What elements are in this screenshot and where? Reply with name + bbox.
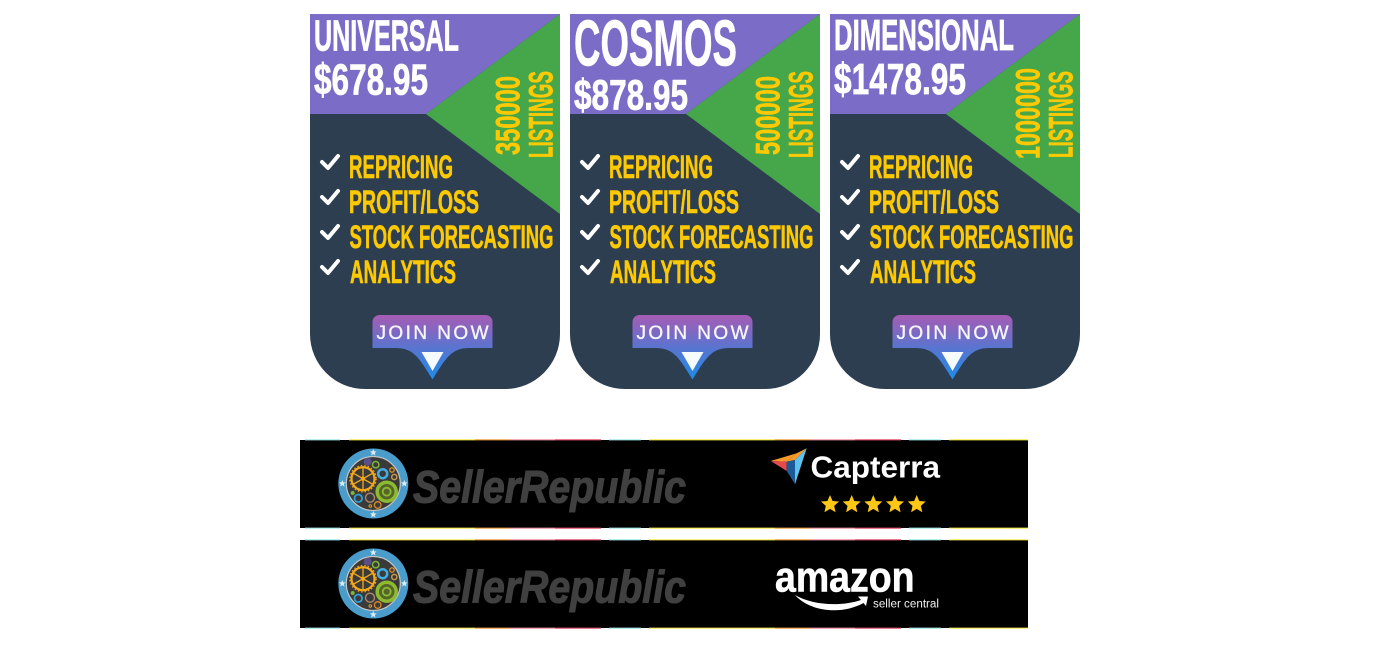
feature: analytics: ANALYTICS (870, 254, 976, 290)
feature: stock forecasting: STOCK FORECASTING (870, 219, 1074, 255)
icon: Seller Republic gear badge (338, 548, 408, 618)
top colour strip (305, 439, 1028, 440)
green listing triangle (426, 14, 560, 214)
panel: Amazon banner (300, 539, 1028, 629)
button: join now (632, 315, 752, 380)
icon: Capterra arrow (771, 448, 807, 484)
listings label: LISTINGS (1042, 71, 1080, 158)
card body (310, 14, 560, 389)
icon: check 2 (582, 191, 598, 203)
panel: Universal plan (310, 12, 560, 389)
bottom colour strip (305, 628, 1028, 629)
purple header (570, 14, 820, 114)
banner background (300, 440, 1028, 528)
button: join now: JOIN NOW (376, 323, 489, 344)
feature: stock forecasting: STOCK FORECASTING (610, 219, 814, 255)
button: join now (372, 315, 492, 380)
icon: check 1 (582, 156, 598, 168)
panel: Dimensional plan (830, 11, 1080, 389)
card body (830, 14, 1080, 389)
five star rating (821, 495, 926, 512)
feature: profit/loss: PROFIT/LOSS (869, 184, 999, 220)
feature: profit/loss: PROFIT/LOSS (609, 184, 739, 220)
icon: check 1 (322, 156, 338, 168)
purple header (830, 14, 1080, 114)
green listing triangle (946, 14, 1080, 214)
plan price: $678.95 (314, 56, 428, 104)
feature: profit/loss: PROFIT/LOSS (349, 184, 479, 220)
seller central label: seller central (873, 599, 939, 611)
button: join now: JOIN NOW (636, 323, 749, 344)
feature: analytics: ANALYTICS (610, 254, 716, 290)
feature: repricing: REPRICING (349, 149, 453, 185)
plan name: DIMENSIONAL (834, 11, 1014, 60)
green listing triangle (686, 14, 820, 214)
listings label: LISTINGS (782, 71, 820, 158)
top colour strip (305, 539, 1028, 540)
feature: repricing: REPRICING (609, 149, 713, 185)
purple header (310, 14, 560, 114)
button: join now: JOIN NOW (896, 323, 1009, 344)
feature: stock forecasting: STOCK FORECASTING (350, 219, 554, 255)
Seller Republic wordmark: SellerRepublic (413, 462, 686, 512)
panel: Cosmos plan (570, 6, 820, 389)
listings label: LISTINGS (522, 71, 560, 158)
icon: check 3 (582, 226, 598, 238)
listings count: 1000000 (1010, 68, 1048, 159)
icon: check 2 (322, 191, 338, 203)
icon: check 3 (322, 226, 338, 238)
button: join now (892, 315, 1012, 380)
listings count: 350000 (490, 76, 528, 155)
Amazon wordmark: amazon (775, 554, 914, 602)
icon: check 4 (582, 261, 598, 273)
feature: analytics: ANALYTICS (350, 254, 456, 290)
icon: Amazon smile arrow (795, 595, 868, 610)
Capterra wordmark: Capterra (810, 451, 941, 485)
plan name: UNIVERSAL (314, 12, 459, 60)
feature: repricing: REPRICING (869, 149, 973, 185)
bottom colour strip (305, 528, 1028, 529)
listings count: 500000 (750, 76, 788, 155)
icon: check 4 (322, 261, 338, 273)
icon: check 2 (842, 191, 858, 203)
icon: check 4 (842, 261, 858, 273)
Seller Republic wordmark: SellerRepublic (413, 562, 686, 612)
banner background (300, 540, 1028, 628)
icon: Seller Republic gear badge (338, 448, 408, 518)
plan price: $878.95 (574, 72, 688, 120)
panel: Capterra banner (300, 439, 1028, 529)
card body (570, 14, 820, 389)
plan price: $1478.95 (834, 55, 966, 104)
plan name: COSMOS (574, 6, 737, 80)
icon: check 3 (842, 226, 858, 238)
icon: check 1 (842, 156, 858, 168)
